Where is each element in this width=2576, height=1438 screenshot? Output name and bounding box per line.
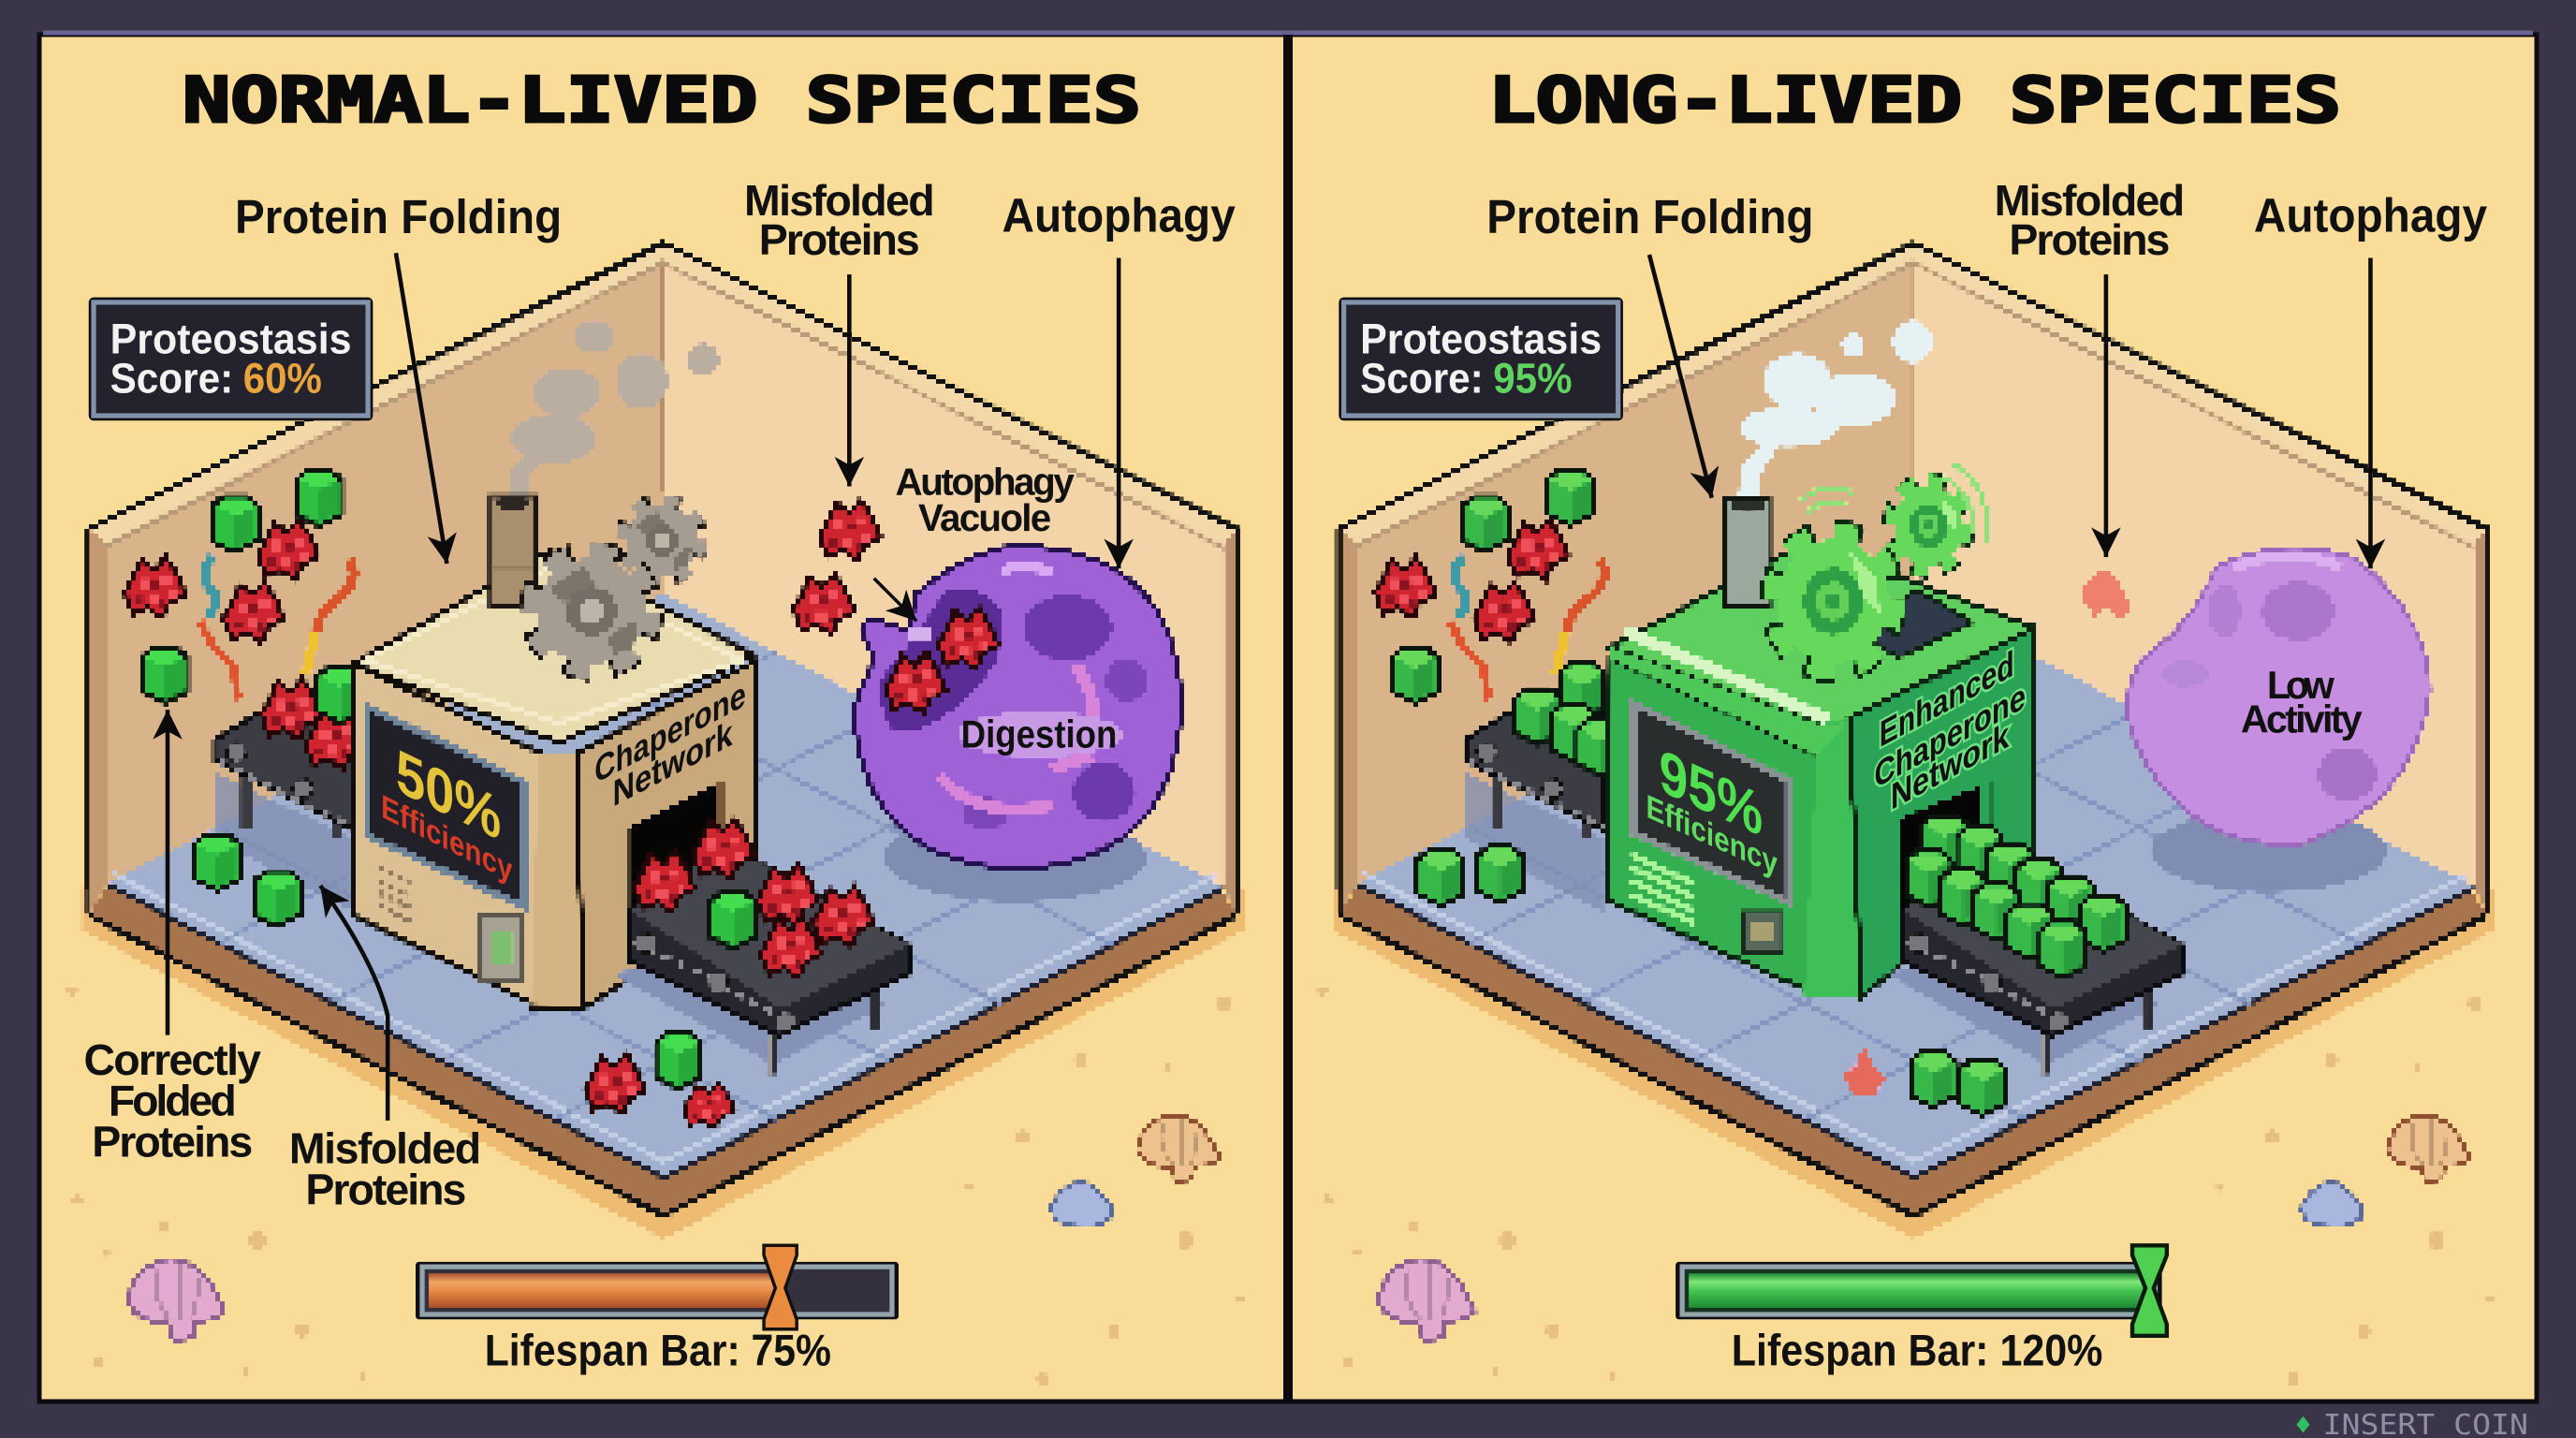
arrow: misfolded proteins bbox=[2105, 274, 2107, 557]
efficiency screen bbox=[1632, 703, 1789, 902]
arrow: protein folding bbox=[396, 253, 446, 564]
machine: chaperone network bbox=[353, 550, 757, 1009]
shell: tan bbox=[1137, 1115, 1220, 1181]
vacuole shadow bbox=[884, 814, 1147, 902]
steam bbox=[1738, 320, 1932, 498]
machine label: network: Network bbox=[1891, 713, 2010, 818]
divider bbox=[1283, 35, 1293, 1401]
arrow: misfolded proteins bbox=[848, 274, 851, 486]
arrow: correctly folded proteins bbox=[167, 710, 168, 1035]
score box: Proteostasis bbox=[1360, 315, 1602, 362]
score box bbox=[1339, 298, 1623, 420]
shell: tan bbox=[2388, 1115, 2470, 1181]
title: LONG-LIVED SPECIES bbox=[1488, 64, 2341, 137]
label: correctly folded proteins: Folded bbox=[109, 1077, 237, 1125]
label: autophagy: Autophagy bbox=[2254, 188, 2488, 242]
score box bbox=[89, 298, 373, 420]
doorway bbox=[629, 782, 718, 961]
chimney bbox=[491, 496, 534, 608]
arrow: protein folding bbox=[1649, 255, 1712, 498]
label: low activity: Low bbox=[2267, 664, 2335, 707]
gears bbox=[533, 503, 700, 668]
lifespan bar bbox=[416, 1245, 899, 1329]
title: NORMAL-LIVED SPECIES bbox=[183, 64, 1141, 137]
front conveyor bbox=[631, 818, 909, 1075]
conveyor shadow bbox=[1884, 953, 2160, 1064]
arrow: floor misfolded proteins bbox=[320, 886, 388, 1121]
frame highlight bbox=[43, 30, 2533, 36]
label: protein folding: Protein Folding bbox=[1486, 190, 1814, 243]
lifespan label: Lifespan Bar: 120% bbox=[1732, 1326, 2102, 1375]
panel: normal-lived species bbox=[39, 35, 1286, 1401]
floating misfolded proteins bbox=[794, 500, 881, 634]
floor proteins bbox=[194, 835, 735, 1128]
faded misfolded protein bbox=[2080, 568, 2132, 621]
score box: Proteostasis bbox=[110, 315, 352, 362]
screen value: 95% bbox=[1660, 736, 1763, 850]
label: misfolded proteins top: Proteins bbox=[759, 215, 920, 264]
wall proteins bbox=[1375, 470, 1593, 703]
lifespan bar bbox=[1676, 1245, 2167, 1336]
label: digestion: Digestion bbox=[961, 713, 1117, 756]
pixel art scene bbox=[1318, 243, 2494, 1387]
label: protein folding: Protein Folding bbox=[235, 190, 562, 243]
machine label: enhanced: Enhanced bbox=[1880, 642, 2014, 756]
front conveyor bbox=[1904, 814, 2182, 1075]
floor proteins bbox=[1418, 846, 2006, 1116]
gears bbox=[1774, 482, 1967, 668]
score box: Score: bbox=[1360, 354, 1484, 402]
machine label: chaperone: Chaperone bbox=[1874, 675, 2026, 797]
label: misfolded proteins top: Misfolded bbox=[744, 176, 935, 225]
label: floor misfolded proteins: Misfolded bbox=[289, 1124, 481, 1173]
panel: long-lived species bbox=[1290, 35, 2537, 1401]
pebble: blue bbox=[1051, 1181, 1112, 1226]
isometric room bbox=[1318, 243, 2494, 1387]
efficiency screen bbox=[368, 707, 524, 907]
conveyor shadow bbox=[611, 953, 887, 1064]
arrow: autophagy bbox=[2369, 258, 2372, 568]
score box: 95% bbox=[1493, 354, 1573, 402]
arrow: autophagy bbox=[1118, 258, 1120, 568]
machine: enhanced chaperone network bbox=[1608, 542, 2035, 997]
label: autophagy: Autophagy bbox=[1003, 188, 1236, 242]
label: autophagy vacuole: Vacuole bbox=[918, 496, 1051, 539]
label: correctly folded proteins: Correctly bbox=[84, 1035, 261, 1084]
pebble: blue bbox=[2302, 1181, 2363, 1226]
arrow: into vacuole bbox=[874, 579, 916, 621]
doorway bbox=[1901, 785, 1982, 953]
screen caption: Efficiency bbox=[1647, 787, 1778, 883]
machine label: chaperone: Chaperone bbox=[594, 672, 746, 792]
screen value: 50% bbox=[396, 735, 501, 854]
shell: pink bbox=[1378, 1259, 1475, 1341]
lifespan label: Lifespan Bar: 75% bbox=[485, 1326, 831, 1375]
score box: 60% bbox=[243, 354, 322, 402]
isometric room bbox=[67, 243, 1244, 1387]
vacuole shadow bbox=[2150, 810, 2387, 892]
smoke bbox=[509, 320, 720, 501]
label: autophagy vacuole: Autophagy bbox=[895, 460, 1075, 503]
pixel art scene bbox=[67, 243, 1244, 1387]
chimney bbox=[1727, 500, 1769, 608]
screen caption: Efficiency bbox=[381, 786, 513, 889]
label: low activity: Activity bbox=[2241, 698, 2363, 741]
label: misfolded proteins top: Proteins bbox=[2009, 215, 2170, 264]
back conveyor bbox=[1465, 664, 1623, 838]
label: floor misfolded proteins: Proteins bbox=[305, 1165, 466, 1213]
shell: pink bbox=[128, 1259, 225, 1341]
speed arcs bbox=[1800, 463, 1988, 542]
machine label: network: Network bbox=[613, 712, 733, 814]
wall proteins bbox=[124, 470, 342, 703]
label: correctly folded proteins: Proteins bbox=[92, 1118, 253, 1167]
score box: Score: bbox=[110, 354, 233, 402]
autophagy vacuole bbox=[854, 546, 1181, 869]
label: misfolded proteins top: Misfolded bbox=[1995, 176, 2185, 225]
low activity vacuole bbox=[2128, 548, 2430, 844]
back conveyor bbox=[215, 668, 366, 838]
